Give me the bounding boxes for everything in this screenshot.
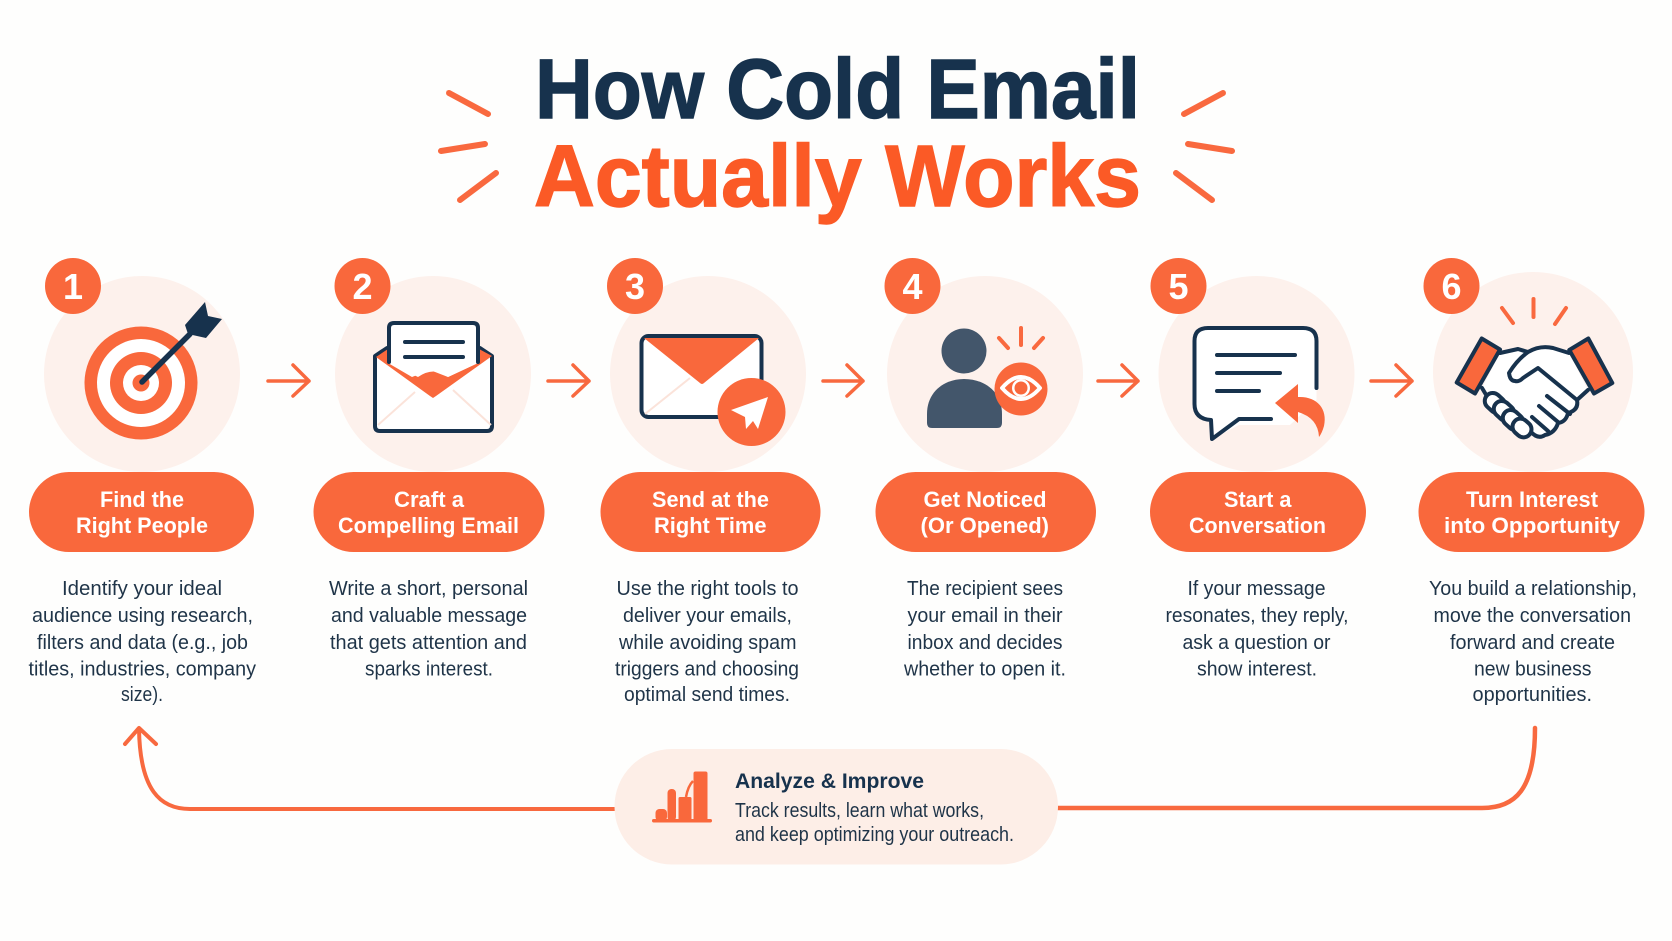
description: deliver your emails,	[623, 605, 792, 627]
description: while avoiding spam	[618, 632, 796, 654]
step 3: send at the right time	[600, 258, 820, 706]
step 2: craft a compelling email: 2	[352, 266, 373, 307]
description: sparks interest.	[365, 658, 493, 680]
pill heading: into Opportunity	[1444, 513, 1621, 538]
description: resonates, they reply,	[1166, 605, 1348, 627]
description: titles, industries, company	[28, 658, 256, 680]
description: triggers and choosing	[615, 658, 799, 680]
step 4: get noticed	[876, 258, 1096, 680]
icon: speech bubble with reply arrow	[1194, 328, 1325, 439]
pill heading	[29, 472, 254, 552]
arrow 4 to 5	[1098, 365, 1138, 396]
panel text	[735, 770, 1014, 846]
description: ask a question or	[1182, 632, 1331, 654]
pill heading: Send at the	[652, 487, 769, 512]
description: optimal send times.	[624, 684, 790, 706]
pill heading: Start a	[1224, 487, 1292, 512]
title	[534, 42, 1141, 225]
description	[28, 578, 256, 706]
feedback line right, from step 6	[1056, 728, 1535, 808]
description: audience using research,	[32, 605, 253, 627]
panel: analyze and improve	[614, 749, 1058, 864]
description: Write a short, personal	[329, 578, 528, 600]
icon: envelope with paper plane	[642, 336, 786, 446]
panel text: and keep optimizing your outreach.	[735, 824, 1014, 846]
description: Identify your ideal	[62, 578, 222, 600]
icon: bar chart	[652, 772, 712, 822]
description: new business	[1474, 658, 1592, 680]
pill heading	[600, 472, 820, 552]
step 3: send at the right time: 3	[625, 266, 645, 307]
icon: open envelope	[375, 323, 492, 431]
pill heading	[314, 472, 544, 552]
feedback arrow left, back to step 1	[125, 728, 616, 809]
description	[1166, 578, 1348, 680]
description: forward and create	[1450, 632, 1615, 654]
step 6: turn interest into opportunity	[1418, 258, 1644, 706]
pill heading: Compelling Email	[338, 513, 519, 538]
step 1: find the right people: 1	[63, 266, 83, 307]
icon: target with dart	[84, 302, 222, 440]
description: You build a relationship,	[1429, 578, 1637, 600]
description	[615, 578, 799, 706]
description	[903, 578, 1066, 680]
panel text: Analyze & Improve	[735, 770, 924, 793]
title: Actually Works	[534, 128, 1141, 225]
description: size).	[121, 684, 163, 706]
description: show interest.	[1197, 658, 1317, 680]
pill heading: Find the	[100, 487, 184, 512]
panel text: Track results, learn what works,	[735, 800, 984, 822]
arrow 1 to 2	[268, 365, 309, 396]
description: filters and data (e.g., job	[37, 632, 248, 654]
step 5: start a conversation: 5	[1168, 266, 1189, 307]
step 4: get noticed: 4	[902, 266, 923, 307]
step 5: start a conversation	[1150, 258, 1366, 680]
arrow 2 to 3	[548, 365, 589, 396]
description: Use the right tools to	[616, 578, 798, 600]
description: your email in their	[908, 605, 1063, 627]
icon: handshake	[1457, 299, 1612, 441]
description: and valuable message	[331, 605, 527, 627]
step 2: craft a compelling email	[314, 258, 544, 680]
description: whether to open it.	[903, 658, 1066, 680]
pill heading	[1418, 472, 1644, 552]
pill heading: Right People	[76, 513, 208, 538]
description: move the conversation	[1434, 605, 1631, 627]
description	[1429, 578, 1637, 706]
arrow 5 to 6	[1371, 365, 1412, 396]
title accent rays	[441, 93, 1232, 200]
step 1: find the right people	[28, 258, 256, 706]
description	[329, 578, 528, 680]
description: opportunities.	[1472, 684, 1592, 706]
description: If your message	[1188, 578, 1326, 600]
pill heading: Get Noticed	[924, 487, 1046, 512]
description: that gets attention and	[330, 632, 527, 654]
description: inbox and decides	[908, 632, 1062, 654]
title: How Cold Email	[535, 42, 1140, 136]
pill heading	[1150, 472, 1366, 552]
pill heading: Conversation	[1189, 513, 1326, 538]
pill heading: (Or Opened)	[920, 513, 1049, 538]
arrow 3 to 4	[823, 365, 863, 396]
pill heading: Craft a	[394, 487, 465, 512]
pill heading: Turn Interest	[1466, 487, 1599, 512]
pill heading	[876, 472, 1096, 552]
pill heading: Right Time	[654, 513, 766, 538]
description: The recipient sees	[907, 578, 1063, 600]
step 6: turn interest into opportunity: 6	[1441, 266, 1462, 307]
icon: person with eye	[927, 328, 1048, 428]
